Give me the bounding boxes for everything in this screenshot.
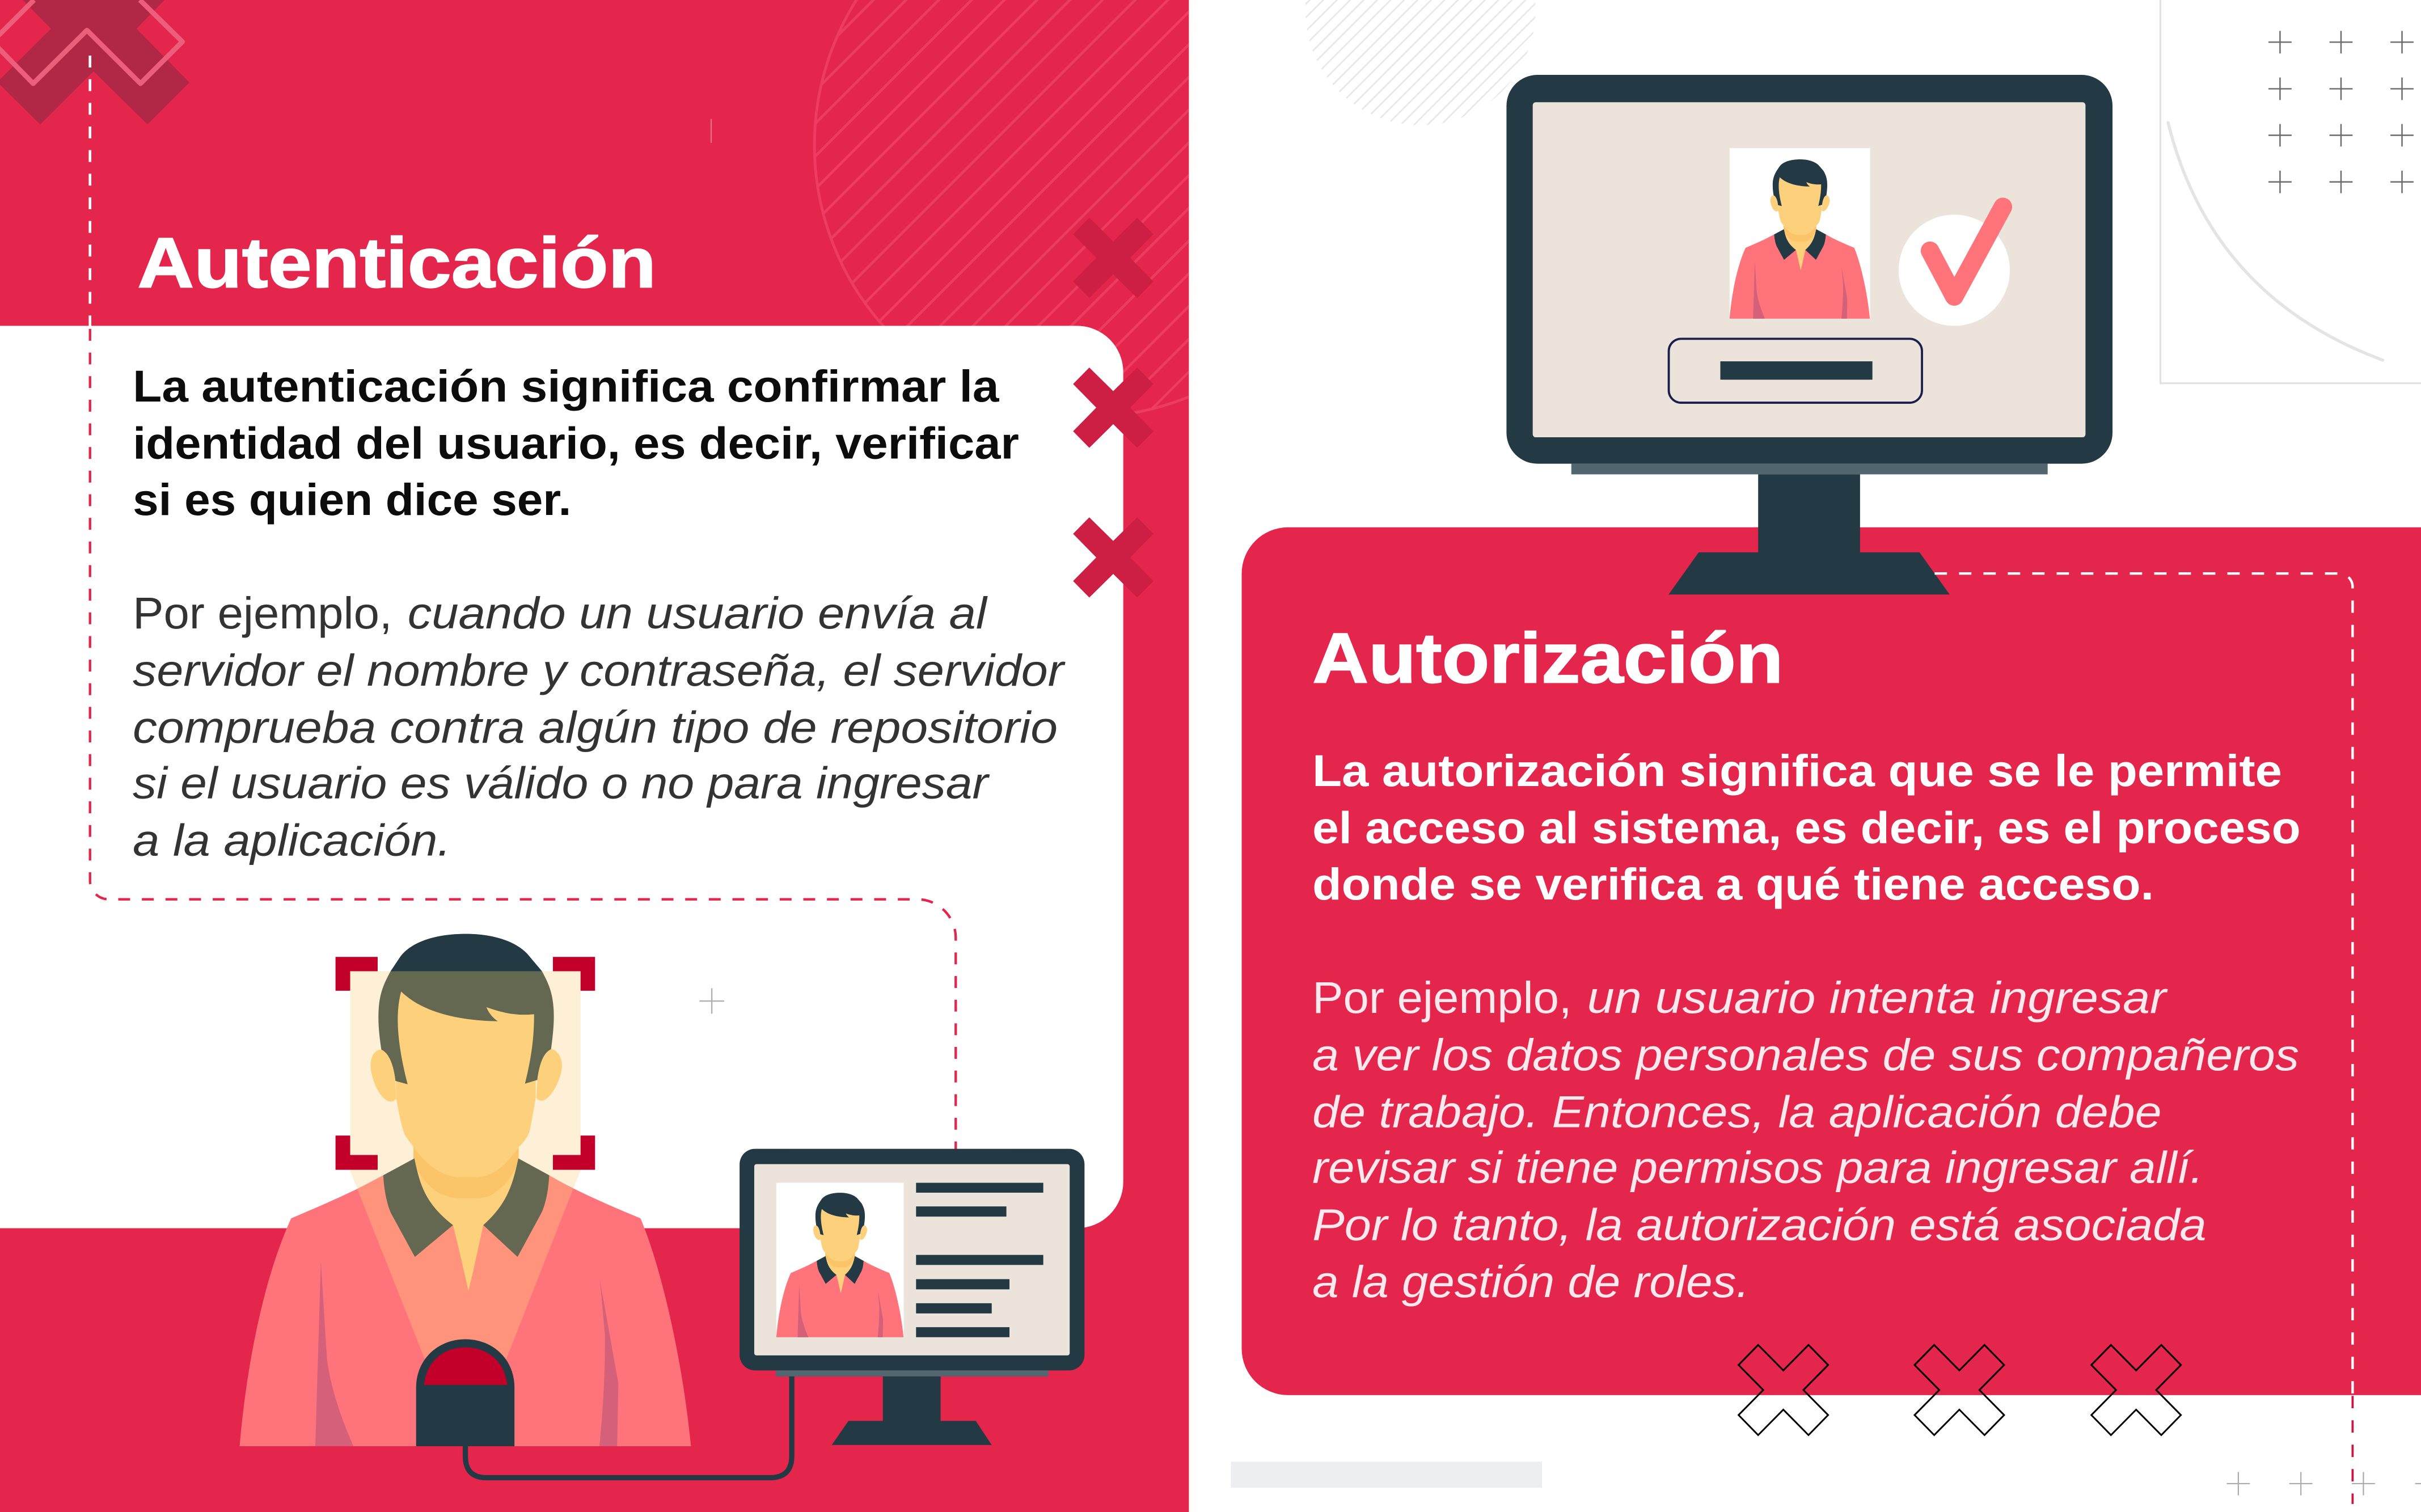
cable [466, 1371, 792, 1478]
illustration: person being scanned [240, 934, 691, 1446]
panel: white text card [0, 326, 1123, 1228]
icon: small dark crosses on the right edge [1073, 218, 1154, 598]
icon: red scan brackets [336, 957, 595, 1170]
illustration: large monitor [1506, 75, 2112, 594]
dashed connector: red part on white [90, 329, 956, 1152]
plus mark [699, 988, 724, 1013]
text block: example of autenticación [133, 588, 1066, 865]
text block: example of autorización: a la gestión de roles. [1312, 1257, 1750, 1307]
text block: example of autenticación: a la aplicación. [133, 815, 451, 865]
tick mark [711, 119, 712, 143]
plus grid top right [2268, 31, 2414, 193]
icon: outlined cross top left [0, 0, 183, 83]
decorative hatched circle on red panel [813, 0, 1189, 414]
decorative curve [2168, 123, 2382, 360]
icon: dark cross top left [0, 0, 189, 124]
text block: example of autenticación: servidor el nombre y contraseña, el servidor [133, 645, 1066, 695]
data lines [916, 1183, 1043, 1337]
illustration: small monitor [740, 1149, 1084, 1445]
gray bar bottom [1231, 1462, 1542, 1488]
dashed connector: white part on red [90, 56, 91, 326]
illustration: face scan backdrop [350, 972, 581, 1220]
text block: example of autenticación: comprueba contra algún tipo de repositorio [133, 703, 1058, 753]
mini person [776, 1193, 903, 1337]
text block: definition of autenticación: si es quien dice ser. [133, 475, 571, 525]
photo in large monitor [1730, 148, 1870, 319]
text block: example of autorización: a ver los datos personales de sus compañeros [1312, 1030, 2299, 1080]
text block: example of autorización [1312, 973, 2299, 1307]
text block: definition of autenticación: La autenticación significa confirmar la [133, 361, 1000, 411]
dashed connector: red part below card [2352, 1396, 2353, 1504]
person in large monitor [1730, 159, 1870, 319]
text block: example of autorización: Por lo tanto, la autorización está asociada [1312, 1200, 2207, 1249]
decorative frame top right [2160, 0, 2421, 383]
icon: outlined crosses [1739, 1345, 2181, 1435]
text block: example of autorización: un usuario intenta ingresar [1587, 973, 2168, 1023]
panel: autorización red card [1241, 527, 2421, 1395]
plus row bottom right [2226, 1472, 2421, 1496]
text block: example of autenticación: cuando un usuario envía al [408, 588, 988, 638]
text block: example of autorización: Por ejemplo, [1312, 973, 1572, 1023]
heading: Autenticación: Autenticación [137, 223, 656, 302]
text block: example of autenticación: Por ejemplo, [133, 588, 392, 638]
photo in small monitor [776, 1183, 904, 1337]
text block: definition of autorización: el acceso al sistema, es decir, es el proceso [1312, 803, 2301, 853]
text block: definition of autorización: donde se verifica a qué tiene acceso. [1312, 859, 2154, 909]
login button [1669, 339, 1922, 403]
text block: definition of autenticación: identidad del usuario, es decir, verificar [133, 419, 1019, 468]
dashed connector: white part on red card [1934, 573, 2352, 1395]
icon: fingerprint reader [416, 1339, 514, 1446]
text block: definition of autorización [1312, 746, 2301, 909]
icon: check mark [1899, 207, 2010, 326]
text block: example of autenticación: si el usuario es válido o no para ingresar [133, 758, 990, 808]
text block: example of autorización: de trabajo. Entonces, la aplicación debe [1312, 1087, 2162, 1137]
text block: definition of autorización: La autorización significa que se le permite [1312, 746, 2282, 796]
text block: example of autorización: revisar si tiene permisos para ingresar allí. [1312, 1143, 2203, 1193]
decorative hatched semicircle top right [1305, 0, 1536, 125]
heading: Autorización: Autorización [1312, 618, 1784, 698]
text block: definition of autenticación [133, 361, 1019, 525]
panel: autenticación red background [0, 0, 1189, 1512]
